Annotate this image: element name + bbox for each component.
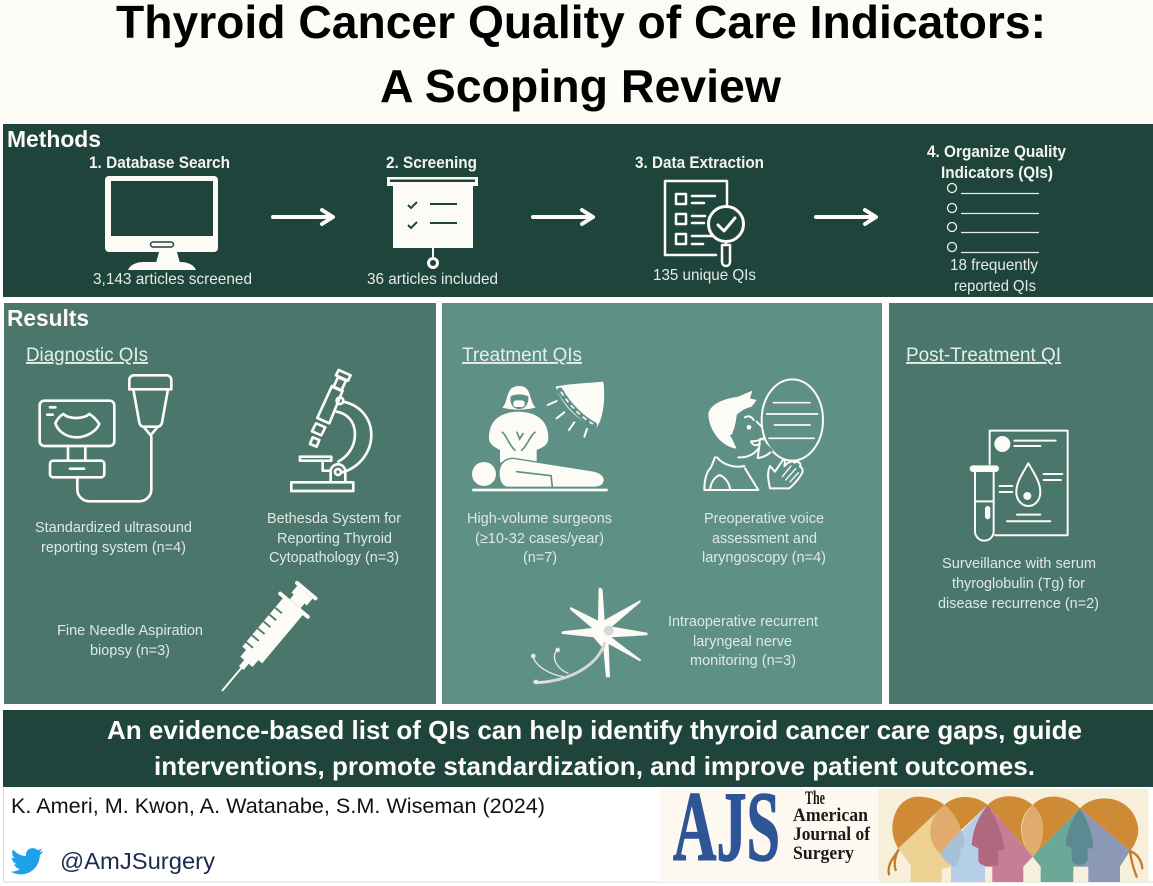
panel: diagnostic results [4,303,436,704]
icon: test tube and report [970,431,1068,541]
icon: computer monitor [105,176,218,270]
footer [3,771,1153,882]
label: surgeons: High-volume surgeons [467,510,612,527]
step 3: data extraction: 135 unique QIs [653,267,756,284]
arrow: step 3 to 4 [816,210,876,224]
step 4: organize quality indicators: 4. Organize Quality [927,143,1067,161]
label: nerve monitoring: Intraoperative recurrent [668,613,819,630]
icon: blank list [948,184,1039,252]
logo: american journal of surgery: Journal of [793,825,871,845]
label: voice assessment [702,510,826,566]
label: ultrasound: Standardized ultrasound [35,519,192,536]
conclusion banner [3,710,1153,787]
label: fine needle aspiration: biopsy (n=3) [90,642,170,659]
step 4: organize quality indicators: 18 frequently [950,257,1038,274]
results heading: Results [7,305,89,331]
icon: ultrasound machine [40,375,171,501]
logo: american journal of surgery: Surgery [793,844,855,864]
icon: checklist with magnifier [665,181,744,266]
illustration: five profiles [878,789,1148,882]
title [0,0,1153,124]
panel: treatment results [442,303,882,704]
icon: presentation board [387,177,478,268]
icon: surgeon and patient [472,382,608,491]
icon: voice assessment [704,379,823,490]
label: surveillance [938,555,1099,612]
step 3: data extraction [635,154,764,284]
step 2: screening: 2. Screening [386,154,477,172]
label: voice assessment: assessment and [712,530,817,547]
panel: post-treatment results [889,303,1153,704]
step 2: screening [367,154,498,288]
authors: K. Ameri, M. Kwon, A. Watanabe, S.M. Wiseman (2024) [11,795,545,818]
diagnostic heading: Diagnostic QIs [26,345,148,366]
step 1: database search [89,154,252,288]
label: fine needle aspiration: Fine Needle Aspiration [57,622,203,639]
label: voice assessment: Preoperative voice [704,510,824,527]
step 1: database search: 1. Database Search [89,154,230,172]
label: surgeons: (≥10-32 cases/year) [475,530,604,547]
twitter handle: @AmJSurgery [60,848,216,874]
label: surveillance: Surveillance with serum [942,555,1096,572]
step 4: organize quality indicators [927,143,1067,295]
logo: american journal of surgery: American [793,806,869,826]
label: surveillance: disease recurrence (n=2) [938,595,1099,612]
step 3: data extraction: 3. Data Extraction [635,154,764,172]
methods heading: Methods [7,126,101,152]
label: surveillance: thyroglobulin (Tg) for [952,575,1085,592]
post-treatment heading: Post-Treatment QI [906,345,1061,366]
icon: twitter bird [10,848,43,874]
icon: neuron [531,588,648,684]
arrow: step 1 to 2 [273,210,333,224]
label: bethesda: Bethesda System for [267,510,401,527]
conclusion banner: An evidence-based list of QIs can help identify thyroid cancer care gaps, guide [107,715,1082,745]
label: bethesda: Cytopathology (n=3) [269,549,399,566]
label: fine needle aspiration [57,622,203,659]
label: surgeons: (n=7) [523,549,557,566]
logo: american journal of surgery: AJS [673,771,780,882]
icon: microscope [291,370,371,491]
label: nerve monitoring [668,613,819,669]
label: nerve monitoring: laryngeal nerve [693,633,792,650]
panel: methods [3,124,1153,297]
step 2: screening: 36 articles included [367,271,498,288]
label: nerve monitoring: monitoring (n=3) [690,652,796,669]
step 4: organize quality indicators: reported QIs [954,278,1036,295]
step 4: organize quality indicators: Indicators (QIs) [941,164,1053,182]
arrow: step 2 to 3 [533,210,593,224]
label: surgeons [467,510,612,566]
title: A Scoping Review [380,60,781,112]
label: ultrasound [35,519,192,556]
conclusion banner: interventions, promote standardization, and improve patient outcomes. [154,751,1035,781]
label: bethesda [267,510,401,566]
label: ultrasound: reporting system (n=4) [41,539,186,556]
logo: american journal of surgery: The [805,789,825,809]
treatment heading: Treatment QIs [462,345,582,366]
label: voice assessment: laryngoscopy (n=4) [702,549,826,566]
label: bethesda: Reporting Thyroid [277,530,392,547]
icon: syringe [207,576,323,704]
step 1: database search: 3,143 articles screened [93,271,252,288]
